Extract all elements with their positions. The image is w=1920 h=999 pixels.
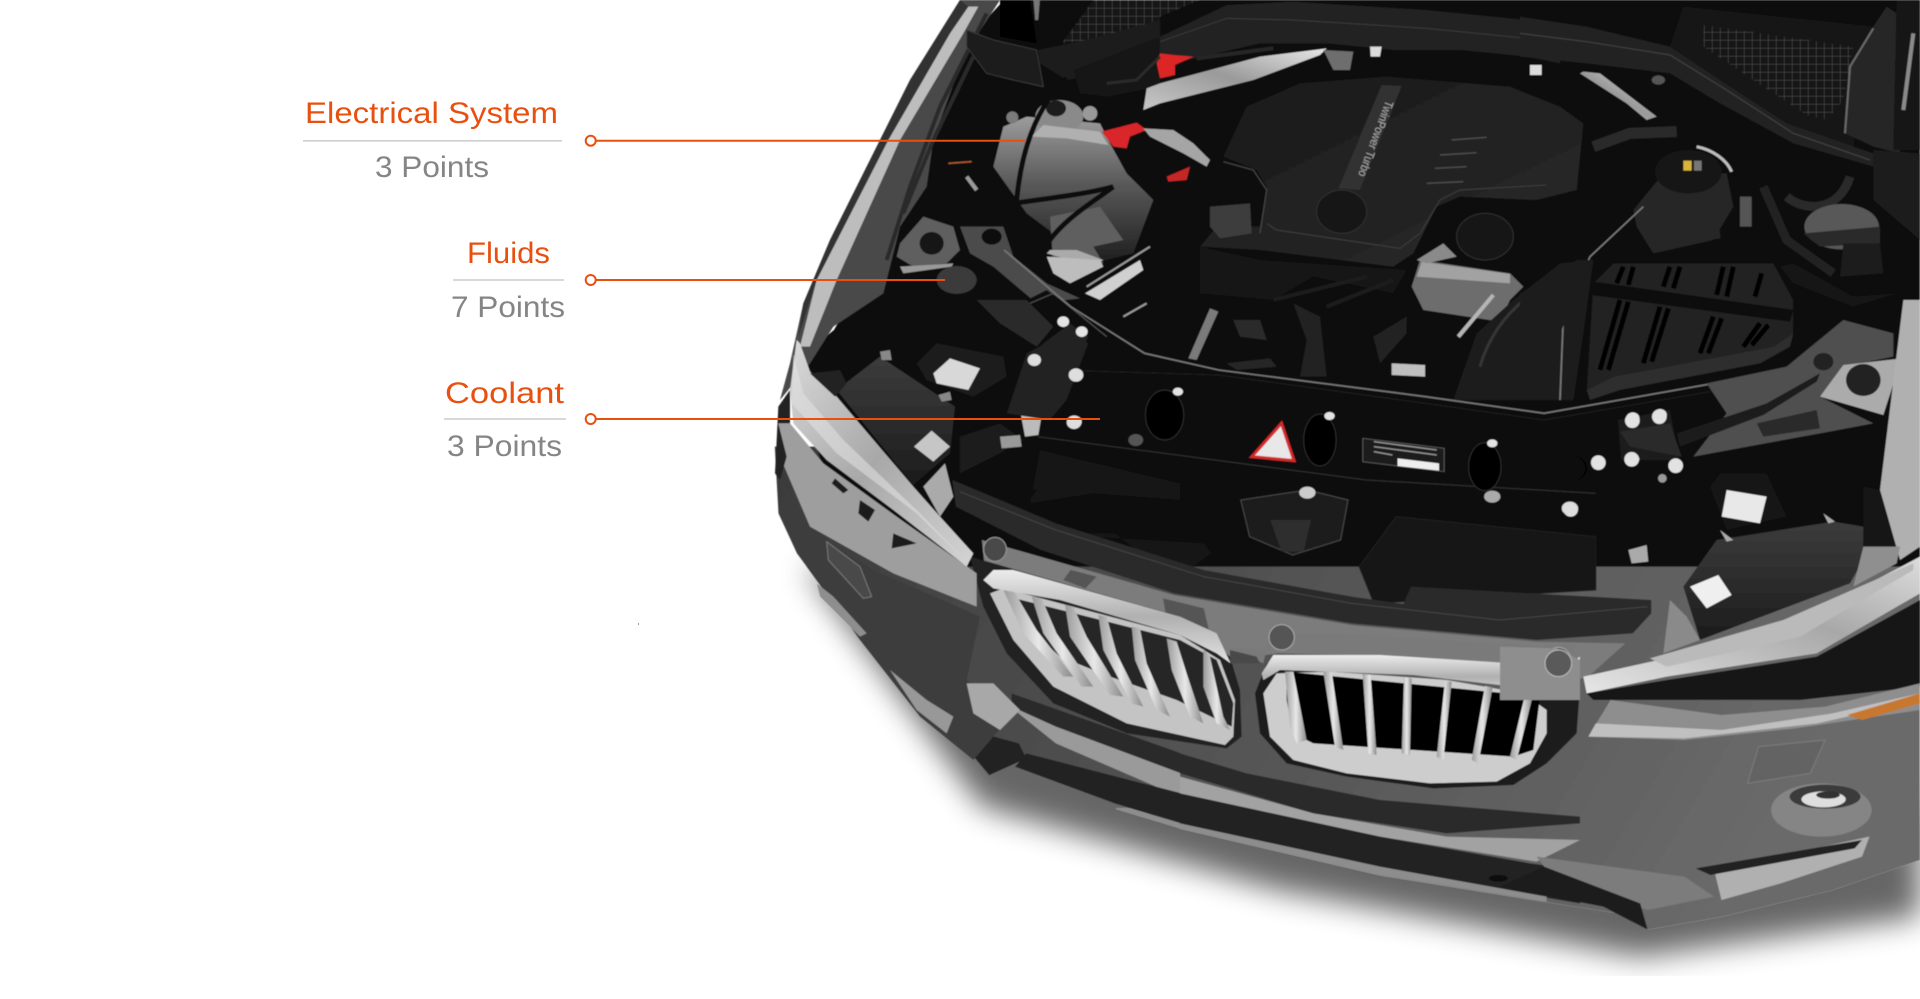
strut base and shock tower — [993, 117, 1153, 263]
lower black lip — [1180, 793, 1580, 903]
right cover — [1683, 522, 1863, 640]
cowl corner — [967, 30, 1043, 87]
car front with open hood — [775, 0, 1920, 957]
hoses and wires — [967, 78, 1113, 250]
oil filler cap — [1210, 203, 1252, 238]
intake hose — [1520, 260, 1593, 400]
rubber bonnet seal — [952, 480, 1651, 640]
plastic panel behind grille — [982, 540, 1625, 683]
left silver strip — [989, 690, 1180, 797]
warning triangle — [1252, 423, 1294, 461]
left air dam corner — [1011, 693, 1180, 773]
air dam — [1180, 753, 1580, 833]
heading: coolant: Coolant — [445, 377, 565, 410]
strut brace right — [1580, 72, 1657, 120]
fender — [780, 0, 1000, 400]
right kidney grille — [1180, 625, 1580, 903]
tow cover right — [1747, 740, 1825, 783]
firewall and vent — [1670, 7, 1873, 147]
count: 7 points: 7 Points — [451, 291, 565, 324]
intake hose — [1453, 260, 1593, 400]
red caps and harness — [1083, 57, 1210, 182]
fog lamp — [1771, 783, 1872, 837]
left bumper shading — [778, 473, 1020, 760]
label: fluids — [451, 237, 565, 324]
engine cover — [1200, 77, 1583, 267]
strut brace — [1143, 48, 1327, 110]
panel bolts — [1028, 316, 1682, 483]
ground shadow — [804, 567, 1920, 957]
right column — [1880, 300, 1920, 560]
front cross arm — [960, 227, 1080, 303]
corrugated hose — [1593, 132, 1677, 147]
engine lower parts — [1187, 307, 1460, 377]
front lower bay — [952, 480, 1651, 683]
right kidney chrome bar — [1262, 655, 1580, 698]
lower bumper right tip — [1500, 857, 1714, 929]
left battery cover — [810, 330, 1180, 540]
connector — [1840, 243, 1883, 277]
heading: fluids: Fluids — [467, 237, 550, 270]
red cap rear — [1157, 53, 1193, 78]
oil filter housing — [1412, 260, 1523, 322]
left black lip — [1015, 753, 1180, 823]
air filter box — [1587, 263, 1793, 390]
right headlight — [1500, 557, 1920, 700]
count: 3 points: 3 Points — [447, 430, 562, 463]
left kidney grille — [970, 537, 1242, 748]
wiper block — [1073, 37, 1160, 97]
heading: electrical system: Electrical System — [305, 97, 558, 130]
label: electrical system — [303, 97, 562, 184]
car body and bumper — [775, 447, 1920, 929]
right bracket — [1620, 423, 1682, 457]
callout line: coolant — [586, 414, 1100, 424]
service label — [1363, 438, 1444, 472]
hood clips — [1370, 47, 1542, 75]
lower right light bar — [1714, 837, 1869, 900]
centre funnel — [1241, 490, 1348, 555]
count: 3 points: 3 Points — [375, 151, 489, 184]
engine cover lettering: TwinPower Turbo — [1355, 99, 1396, 179]
sensor box — [1710, 473, 1787, 530]
cover lower block — [1200, 247, 1407, 300]
silver bumper strip — [1180, 777, 1580, 862]
callout line: fluids — [586, 275, 945, 285]
label: coolant — [444, 377, 566, 463]
bay clutter — [1047, 257, 1103, 283]
hood seal — [1520, 17, 1873, 167]
washer reservoir — [890, 266, 977, 313]
engine bay base — [790, 0, 1920, 567]
left headlight — [775, 340, 977, 607]
upper hood seal — [1160, 2, 1560, 67]
right wing, box and covers — [1558, 300, 1920, 653]
front bracket strip — [1027, 290, 1160, 367]
wires and hoses — [1667, 233, 1720, 240]
left kidney chrome bar — [983, 570, 1231, 663]
right headlight lower lens — [1588, 683, 1920, 740]
left fender and bay — [780, 0, 1160, 400]
coolant reservoir — [1633, 173, 1733, 253]
radiator support panel — [1004, 250, 1722, 567]
left suspension dome — [897, 217, 960, 267]
callout line: electrical system — [586, 136, 1026, 146]
right bay — [1520, 0, 1920, 400]
barcode tag — [1392, 363, 1425, 377]
engine cover and centre bay — [1143, 0, 1593, 400]
